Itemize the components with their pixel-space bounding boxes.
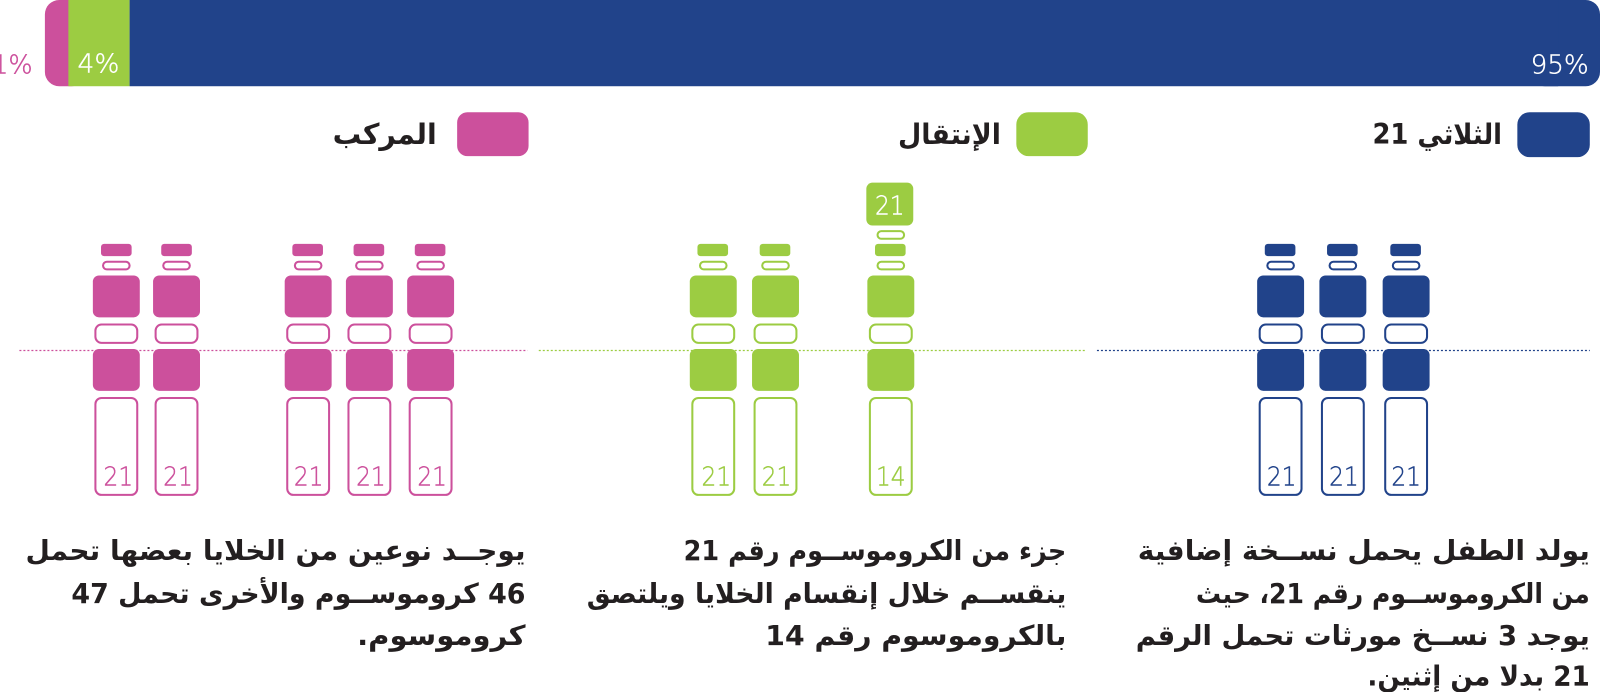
stacked percentage bar: 95% [1531, 50, 1589, 80]
stacked percentage bar: 4% [78, 49, 119, 79]
chromosome 21 blue 1: 21 [1267, 463, 1296, 493]
text block: trisomy description [1136, 535, 1590, 692]
text block: trisomy description: 21 بدلا من إثنين. [1367, 661, 1590, 692]
chromosome 21 blue 2: 21 [1329, 463, 1359, 493]
text block: translocation description: ينقســم خلال إنقسام الخلايا ويلتصق [587, 578, 1066, 610]
chromosome 21 pink 4: 21 [356, 463, 386, 493]
chromosome 14 green with attached 21 fragment [866, 183, 914, 495]
chromosome 21 green 1: 21 [702, 463, 731, 493]
chromosome 14 green with attached 21 fragment: 21 [875, 191, 905, 221]
chromosome 21 pink 5 [407, 244, 454, 495]
chromosome group: translocation [690, 183, 914, 495]
chromosome 14 green with attached 21 fragment: 14 [876, 463, 906, 493]
dotted axis: mosaic [19, 350, 528, 352]
stacked percentage bar [0, 0, 1600, 86]
text block: mosaic description: كروموسوم. [357, 620, 527, 652]
chromosome 21 blue 1 [1257, 244, 1304, 495]
chromosome 21 green 2 [752, 244, 799, 495]
text block: translocation description [587, 535, 1066, 652]
text block: mosaic description: 46 كروموســوم والأخرى تحمل 47 [71, 576, 526, 610]
chromosome 21 green 1 [690, 244, 737, 495]
legend: translocation [898, 112, 1088, 156]
text block: trisomy description: يولد الطفل يحمل نســخة إضافية [1138, 535, 1590, 567]
chromosome group: mosaic [93, 244, 454, 495]
chromosome 21 pink 2 [153, 244, 200, 495]
legend: mosaic: المركب [333, 117, 437, 151]
chromosome 21 pink 1: 21 [104, 463, 133, 493]
chromosome 21 blue 2 [1319, 244, 1366, 495]
chromosome 21 pink 3 [285, 244, 332, 495]
chromosome 21 pink 1 [93, 244, 140, 495]
text block: translocation description: جزء من الكروموســوم رقم 21 [684, 535, 1066, 567]
legend: trisomy 21 [1372, 112, 1590, 157]
chromosome 21 pink 5: 21 [417, 463, 447, 493]
legend: translocation: الإنتقال [898, 117, 1001, 151]
chromosome 21 blue 3 [1383, 244, 1430, 495]
text block: mosaic description: يوجــد نوعين من الخلايا بعضها تحمل [26, 535, 526, 567]
dotted axis: trisomy [1097, 350, 1590, 352]
text block: translocation description: بالكروموسوم رقم 14 [765, 620, 1066, 652]
chromosome 21 pink 4 [346, 244, 393, 495]
text block: mosaic description [26, 535, 527, 652]
dotted axis: translocation [539, 350, 1087, 352]
chromosome group: trisomy 21 [1257, 244, 1430, 495]
chromosome 21 green 2: 21 [762, 463, 791, 493]
chromosome 21 blue 3: 21 [1391, 463, 1421, 493]
legend: trisomy 21: الثلاثي 21 [1372, 117, 1502, 151]
text block: trisomy description: يوجد 3 نســخ مورثات تحمل الرقم [1136, 620, 1590, 652]
chromosome 21 pink 2: 21 [163, 463, 193, 493]
legend: mosaic [333, 112, 529, 156]
chromosome 21 pink 3: 21 [294, 463, 323, 493]
